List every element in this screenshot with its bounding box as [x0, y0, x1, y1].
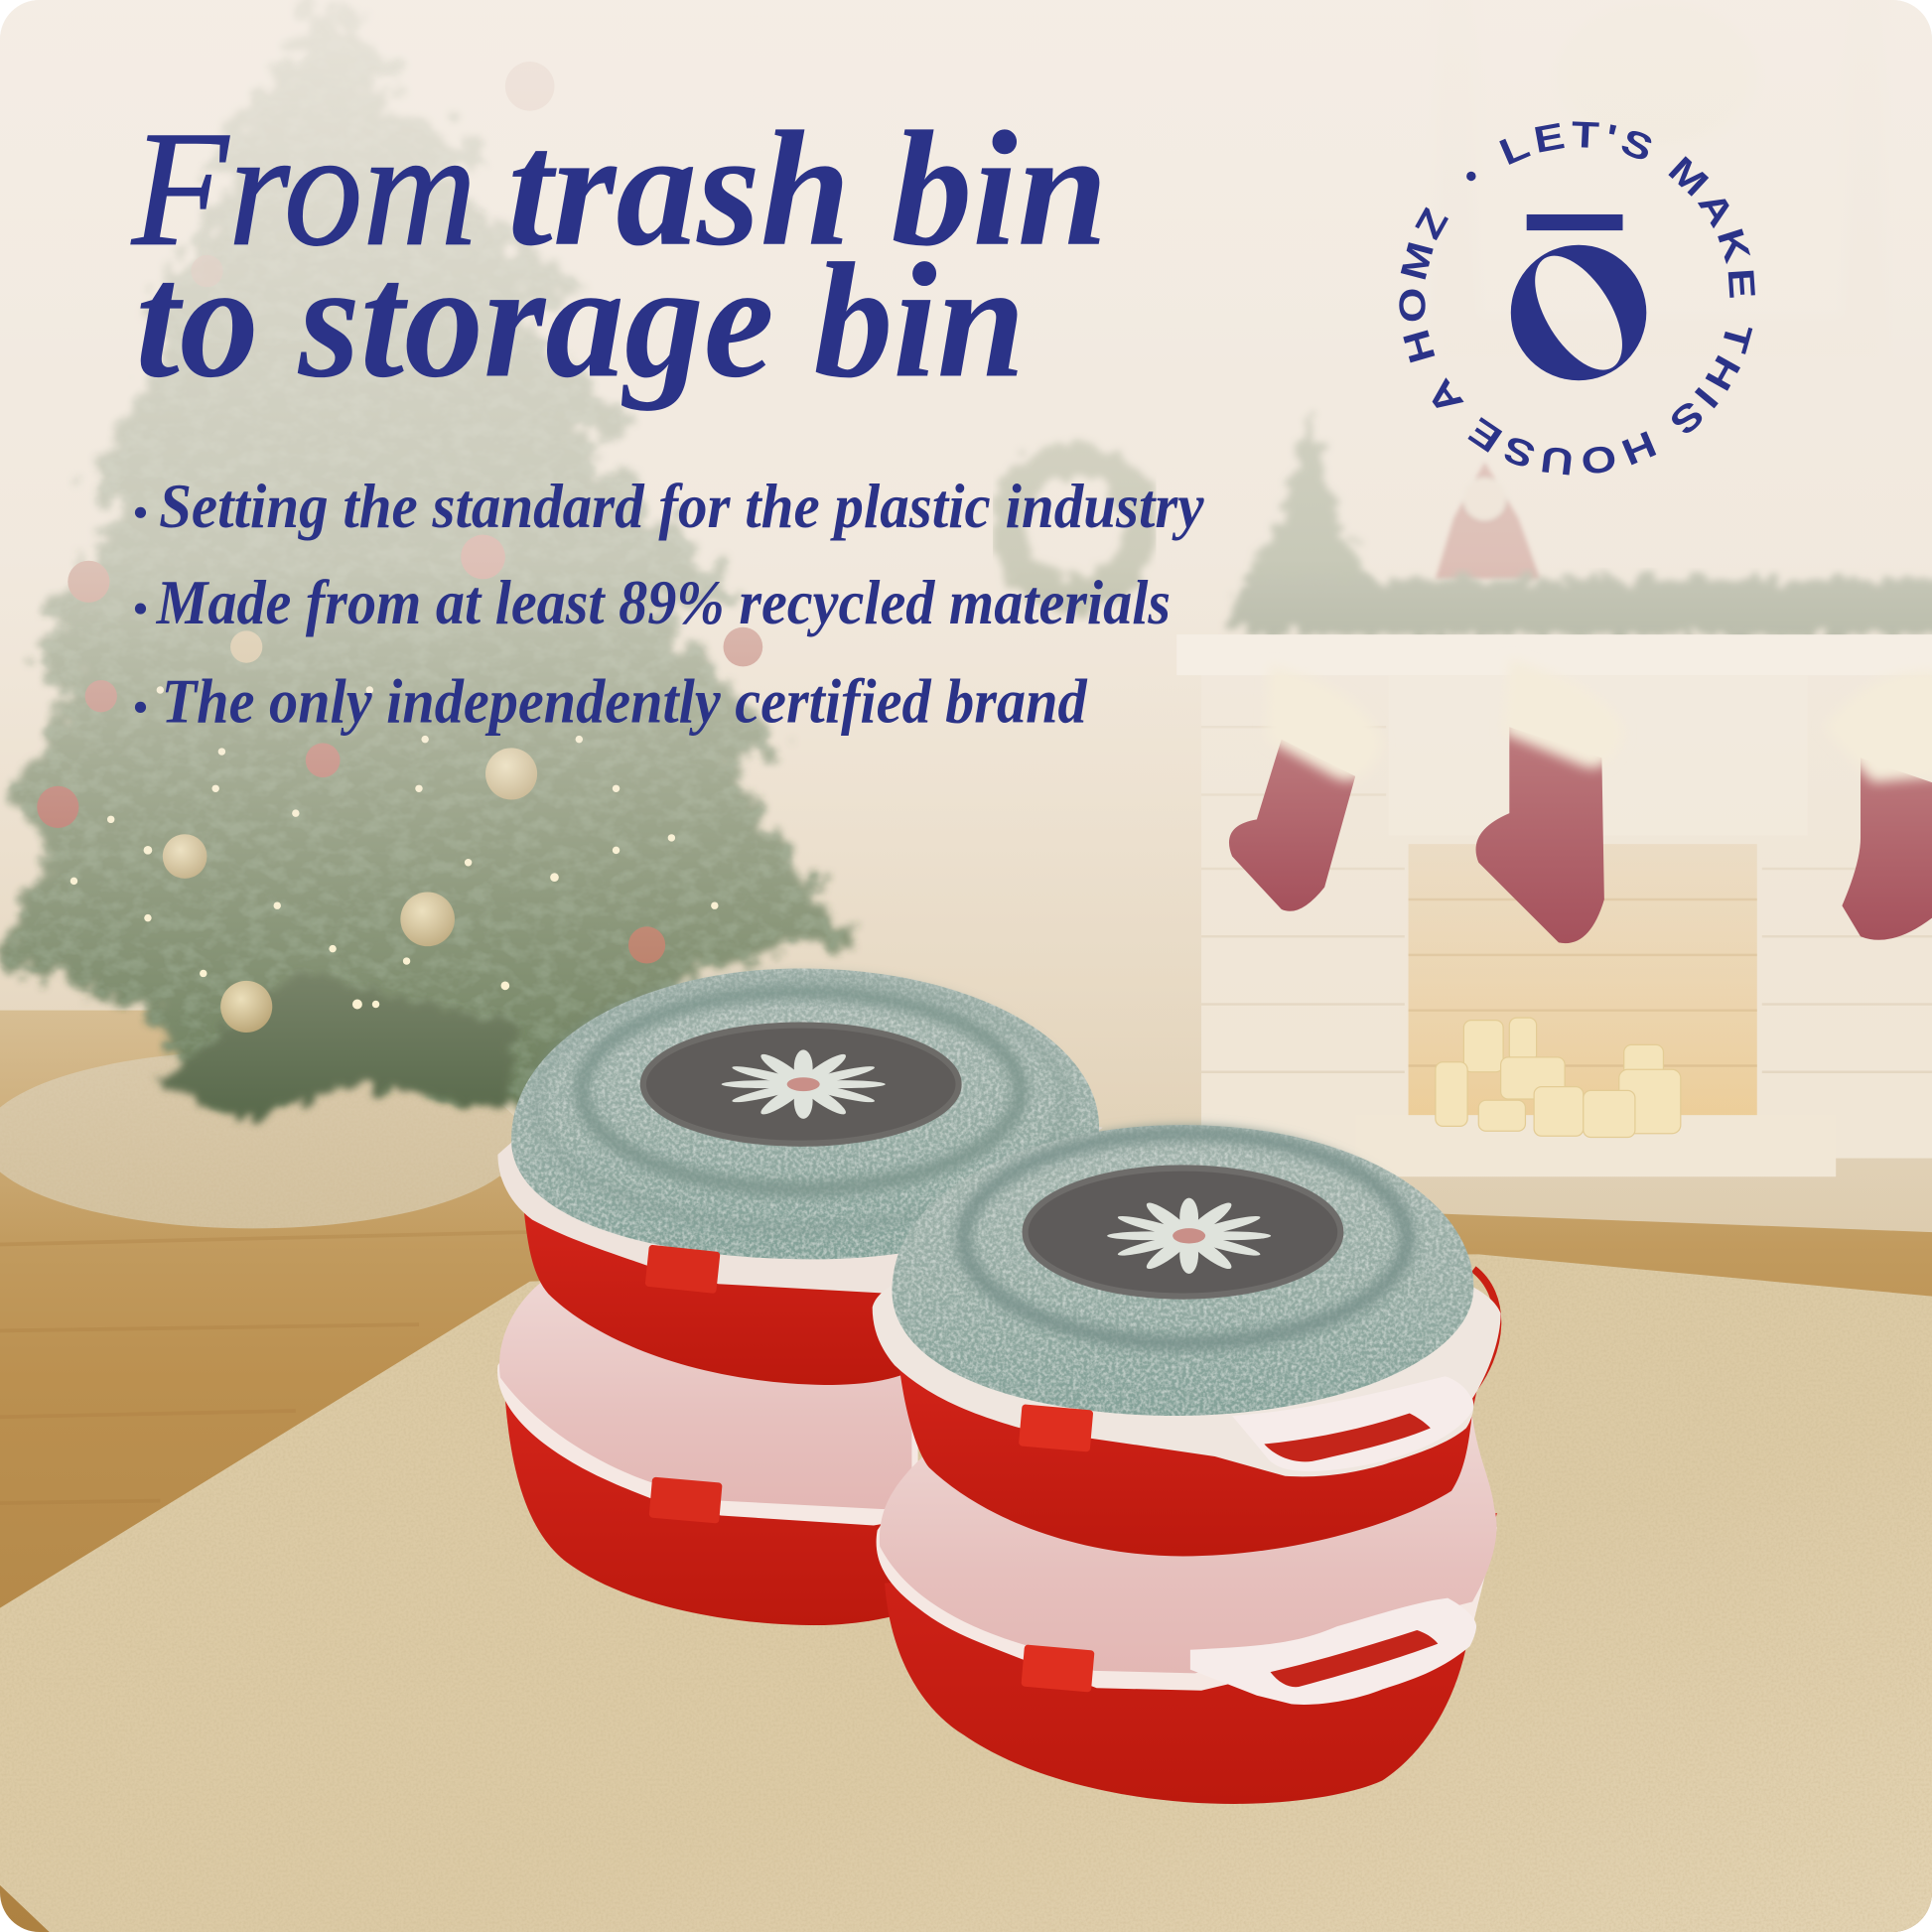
back stack lower latch [649, 1477, 723, 1524]
garland [1232, 579, 1932, 635]
front stack lower latch [1021, 1644, 1095, 1693]
title [131, 97, 1108, 412]
front stack upper red base [899, 1355, 1484, 1556]
front stack lower clear flange [877, 1417, 1497, 1691]
back stack lower clear lid [499, 1282, 911, 1511]
back stack lower red base [505, 1399, 918, 1625]
background: fireplace [1176, 413, 1932, 1176]
front stack upper handle [1232, 1376, 1473, 1471]
title: to storage bin [136, 229, 1026, 412]
background: room wall [0, 0, 1932, 1244]
title: trash bin [507, 97, 1108, 280]
front stack upper felt-covered wreath lid [893, 1125, 1473, 1416]
front stack upper clear rim [873, 1242, 1501, 1476]
logo badge [1399, 121, 1755, 475]
front stack lower red base [885, 1513, 1497, 1804]
stocking left [1229, 665, 1382, 911]
background: wreath [1007, 460, 1142, 595]
badge circular slogan: LET'S MAKE THIS HOUSE A HOMZ [1399, 121, 1755, 475]
chimney breast with bricks [1201, 792, 1932, 1158]
mantel figurine [1436, 462, 1540, 579]
back stack felt-covered wreath lid [511, 968, 1099, 1259]
front stack of storage bins [873, 1125, 1501, 1804]
mantel tree [1241, 412, 1375, 588]
baubles [37, 62, 762, 1033]
background: wood floor [0, 1011, 1932, 1932]
background: wall picture frame [1436, 0, 1885, 363]
candles [1436, 1018, 1681, 1138]
background: Christmas tree [0, 0, 850, 1121]
bullet 2: Made from at least 89% recycled materials [156, 568, 1171, 637]
front stack lower clear lid [880, 1417, 1497, 1673]
badge letter o [1511, 245, 1646, 380]
back stack of storage bins [497, 968, 1103, 1625]
back stack lower clear flange [497, 1307, 918, 1525]
front stack lower handle [1190, 1598, 1476, 1705]
firebox [1409, 844, 1757, 1121]
stocking right [1824, 671, 1932, 940]
bullet 1: Setting the standard for the plastic industry [159, 472, 1204, 541]
background: tree skirt [0, 1051, 523, 1228]
back stack upper red base [523, 1207, 905, 1385]
badge macron bar [1527, 214, 1622, 230]
stockings [1229, 659, 1932, 943]
title: From [131, 97, 477, 280]
stocking centre [1476, 659, 1624, 943]
front stack upper latch [1019, 1404, 1093, 1452]
background: wood grain [0, 1231, 526, 1328]
bullet 3: The only independently certified brand [162, 666, 1088, 736]
bullet list [135, 472, 1204, 736]
fairy lights [70, 686, 719, 1009]
back stack upper clear rim [497, 1072, 1103, 1294]
mantel shelf [1176, 634, 1932, 675]
back stack upper latch [645, 1245, 721, 1294]
rug [0, 1254, 1932, 1932]
lower dense branches [160, 973, 517, 1121]
badge dot [1466, 172, 1476, 181]
background: haze overlay [0, 0, 1932, 1244]
hearth [1355, 1115, 1836, 1176]
